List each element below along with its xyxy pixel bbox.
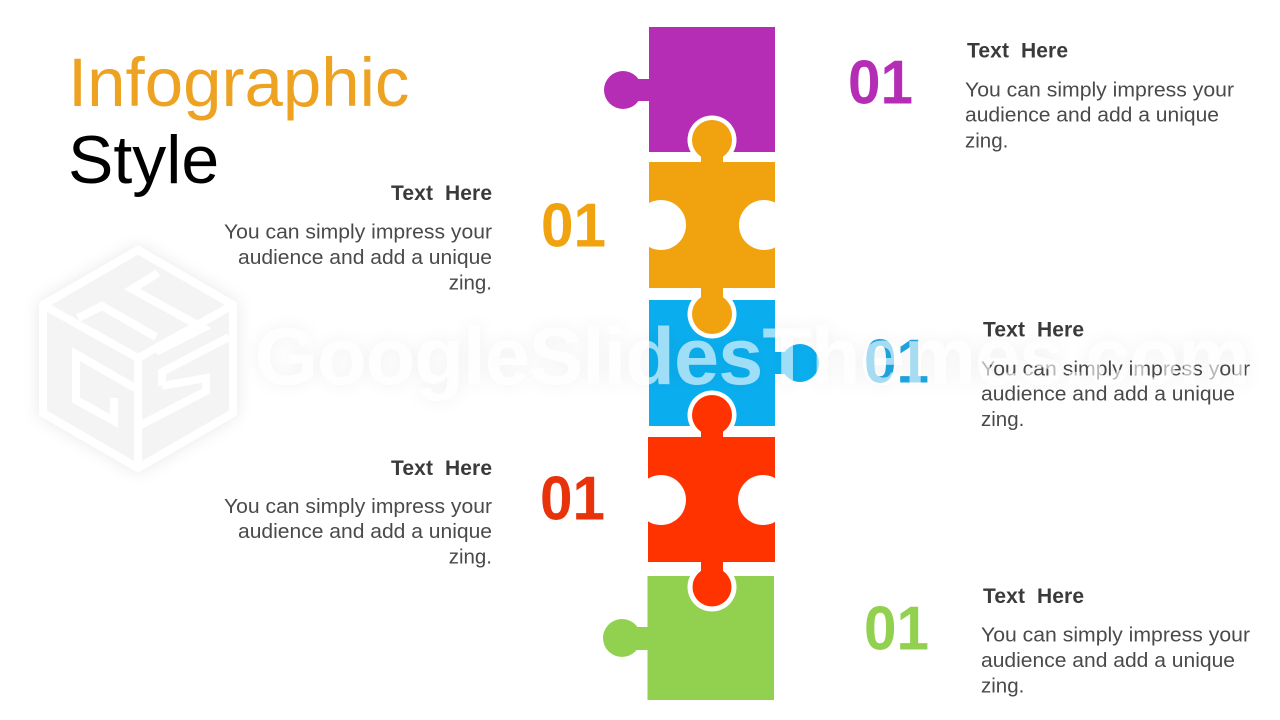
number: red 01: 01 xyxy=(540,464,605,534)
text block: bottom right: Text Here xyxy=(983,585,1084,608)
text block: top right xyxy=(965,40,1234,152)
text block: bottom right: audience and add a unique xyxy=(981,649,1235,672)
puzzle piece: blue xyxy=(649,286,819,426)
text block: lower left: You can simply impress your xyxy=(224,495,492,518)
text block: upper left xyxy=(224,182,492,294)
text block: bottom right xyxy=(981,585,1250,698)
puzzle piece: red xyxy=(630,390,793,562)
title: Infographic xyxy=(68,44,409,121)
text block: lower left: Text Here xyxy=(391,457,492,480)
number: orange 01: 01 xyxy=(541,192,606,260)
text block: bottom right: zing. xyxy=(981,674,1024,698)
text block: upper left: audience and add a unique xyxy=(238,246,492,269)
text block: middle right: audience and add a unique xyxy=(981,382,1235,406)
text block: top right: Text Here xyxy=(967,40,1068,62)
text block: top right: zing. xyxy=(965,130,1008,152)
number: blue 01: 01 xyxy=(864,328,929,396)
text block: lower left: zing. xyxy=(449,546,492,568)
watermark text: GoogleSlidesThemes.com xyxy=(255,312,1250,402)
text block: upper left: Text Here xyxy=(391,182,492,205)
text block: bottom right: You can simply impress your xyxy=(981,624,1250,646)
number: purple 01: 01 xyxy=(848,48,913,118)
text block: top right: audience and add a unique xyxy=(965,104,1219,126)
number: green 01: 01 xyxy=(864,594,929,664)
text block: lower left: audience and add a unique xyxy=(238,520,492,543)
text block: upper left: You can simply impress your xyxy=(224,220,492,244)
puzzle piece: green xyxy=(603,561,774,700)
puzzle piece: orange xyxy=(630,116,794,288)
text block: lower left xyxy=(224,457,492,568)
puzzle column xyxy=(603,27,819,700)
text block: top right: You can simply impress your xyxy=(965,78,1234,102)
title: Style xyxy=(68,122,219,198)
text block: middle right: You can simply impress your xyxy=(981,358,1250,380)
watermark logo: cube xyxy=(43,250,233,468)
text block: middle right: zing. xyxy=(981,408,1024,431)
title xyxy=(68,44,409,198)
text block: middle right: Text Here xyxy=(983,318,1084,342)
text block: upper left: zing. xyxy=(449,272,492,294)
puzzle piece: purple xyxy=(604,27,775,152)
text block: middle right xyxy=(981,318,1250,431)
